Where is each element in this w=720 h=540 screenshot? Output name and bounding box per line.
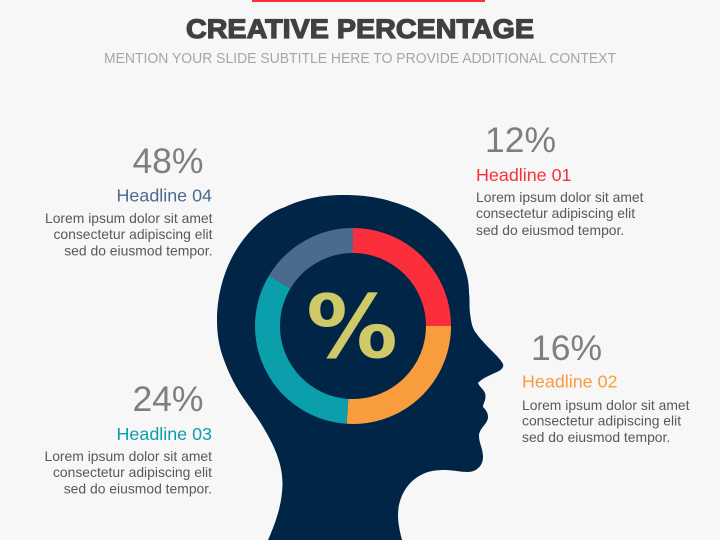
- body text: consectetur adipiscing elit: [53, 464, 212, 480]
- body text: Lorem ipsum dolor sit amet: [476, 189, 644, 205]
- heading: Headline 04: [116, 186, 212, 206]
- percent symbol: %: [306, 278, 398, 379]
- head silhouette: [217, 195, 503, 540]
- head silhouette with donut chart: [217, 195, 503, 540]
- body text: Lorem ipsum dolor sit amet: [522, 397, 690, 413]
- body text: sed do eiusmod tempor.: [522, 429, 670, 445]
- top accent bar: [252, 0, 485, 2]
- title: CREATIVE PERCENTAGE: [186, 14, 534, 44]
- block: headline 01: [476, 120, 644, 238]
- value 48%: 48%: [132, 141, 204, 181]
- block: headline 04: [45, 141, 213, 259]
- heading: Headline 03: [116, 424, 212, 444]
- body text: sed do eiusmod tempor.: [476, 222, 624, 238]
- body text: consectetur adipiscing elit: [53, 226, 213, 242]
- subtitle: MENTION YOUR SLIDE SUBTITLE HERE TO PROVIDE ADDITIONAL CONTEXT: [104, 51, 616, 67]
- segment: orange: [348, 326, 438, 411]
- block: headline 02: [522, 328, 690, 445]
- segment: teal: [268, 282, 348, 411]
- body text: sed do eiusmod tempor.: [64, 243, 212, 259]
- donut chart: [268, 240, 438, 411]
- segment: red: [353, 240, 438, 326]
- heading: Headline 01: [476, 165, 572, 185]
- value 16%: 16%: [531, 328, 602, 368]
- segment: slate blue: [280, 240, 353, 282]
- value 12%: 12%: [485, 120, 556, 160]
- body text: consectetur adipiscing elit: [522, 413, 681, 429]
- body text: Lorem ipsum dolor sit amet: [45, 210, 213, 226]
- body text: consectetur adipiscing elit: [476, 205, 635, 221]
- body text: sed do eiusmod tempor.: [64, 481, 212, 497]
- body text: Lorem ipsum dolor sit amet: [44, 448, 212, 464]
- heading: Headline 02: [522, 372, 618, 392]
- value 24%: 24%: [132, 379, 204, 419]
- block: headline 03: [44, 379, 212, 497]
